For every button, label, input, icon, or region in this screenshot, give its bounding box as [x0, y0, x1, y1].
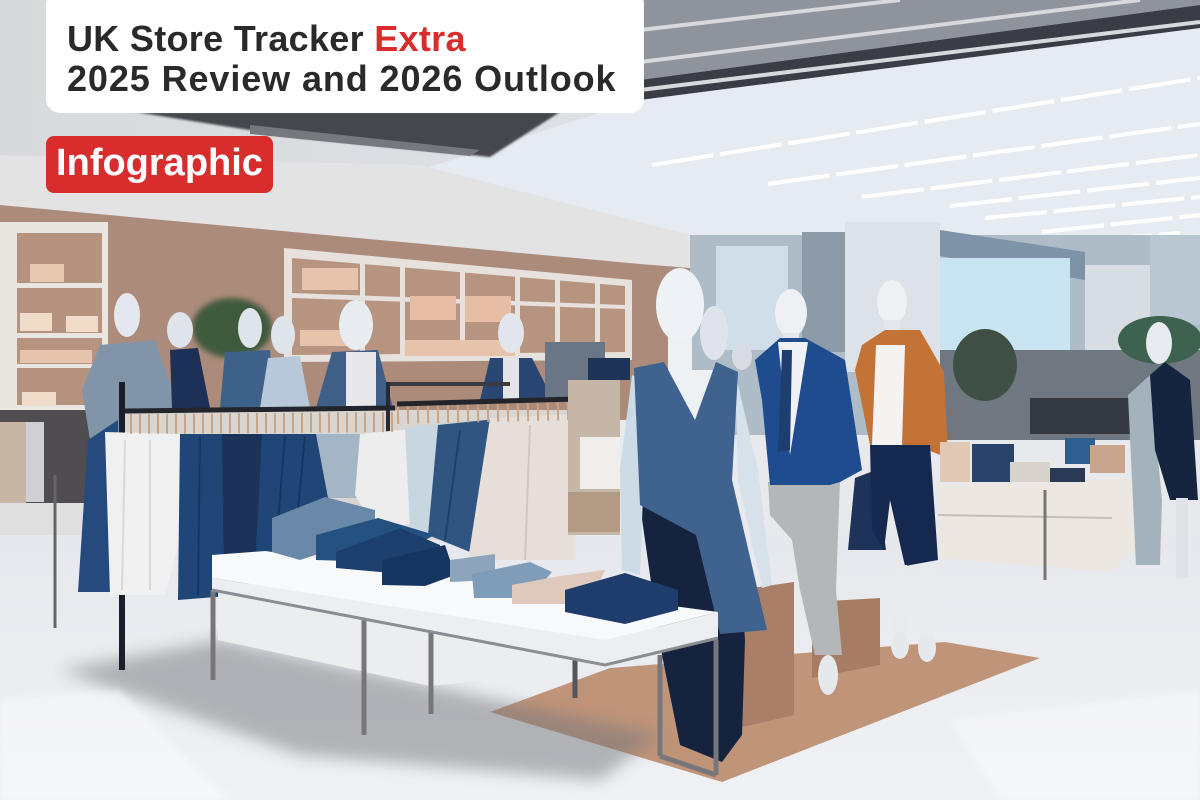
title line two: 2025 Review and 2026 Outlook — [67, 58, 616, 99]
floor reflections — [0, 690, 1200, 800]
table shadow — [60, 640, 660, 780]
man mannequin blue blazer — [755, 289, 862, 695]
ceiling lights — [652, 78, 1200, 240]
infographic badge: Infographic — [56, 142, 263, 184]
table front legs — [660, 640, 716, 775]
infographic badge — [46, 136, 273, 193]
back wall — [0, 205, 690, 420]
back shelves left — [0, 222, 108, 410]
back shelves centre — [284, 248, 632, 362]
right display counter — [938, 438, 1136, 580]
title panel — [46, 0, 644, 113]
folded stacks on table — [272, 497, 678, 624]
ceiling — [0, 0, 1200, 300]
rug — [490, 642, 1040, 782]
clothes rack — [78, 382, 575, 670]
background mannequins — [82, 293, 752, 440]
table base — [213, 590, 575, 735]
shelf unit and boxes — [568, 380, 880, 728]
floor — [0, 535, 1200, 800]
right window area — [690, 222, 1200, 440]
display table top — [212, 551, 718, 665]
right mannequin — [1128, 322, 1198, 578]
plant — [192, 298, 272, 358]
title line one: UK Store Tracker Extra — [67, 18, 466, 59]
woman mannequin orange blazer — [848, 280, 948, 662]
left side low wall and rail — [0, 410, 90, 628]
centre mannequin — [620, 268, 772, 762]
